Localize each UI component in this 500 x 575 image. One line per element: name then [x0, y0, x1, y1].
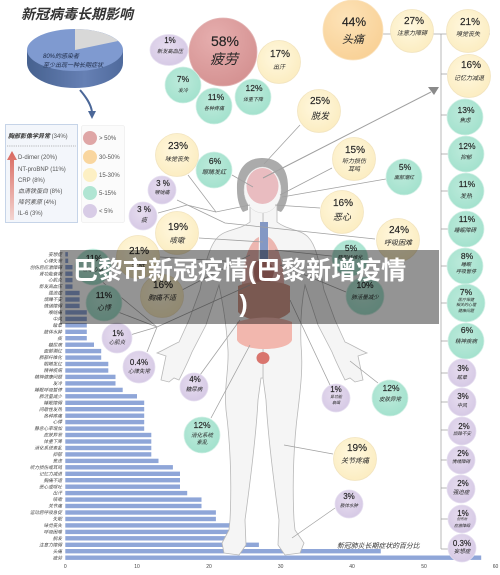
bubble: facial flushing 5%: 5% [399, 162, 412, 172]
legend [82, 126, 124, 222]
bubble: attention 27% [390, 10, 434, 52]
bubble: limb edema 3% [335, 490, 363, 518]
bubble: PTSD 1%: 1% [457, 509, 469, 518]
bubble: red eyes 6% [196, 152, 232, 188]
bar chart: share of long covid symptoms: 心悸 [53, 420, 63, 425]
pie chart: 80% of infected: 至少出现一种长期症状 [43, 61, 104, 69]
bubble: sore throat 3% [148, 176, 176, 204]
bubble: fever 11% [448, 173, 484, 209]
arrow: rising biomarkers [7, 151, 17, 220]
bubble: hearing loss 15%: 耳鸣 [348, 165, 361, 173]
bubble: skin 12%: 皮肤异常 [379, 396, 402, 403]
brain [246, 168, 278, 204]
bubble: mood disorder 2% [447, 446, 475, 474]
banner: headline overlay: ) [239, 290, 248, 318]
bubble: OCD 2%: 强迫症 [453, 489, 471, 496]
bubble: dyspnea 24%: 呼吸困难 [384, 239, 413, 247]
bubble: fatigue 58% [189, 18, 257, 86]
bar chart: share of long covid symptoms: 心肌炎 [48, 278, 62, 283]
bubble: sore throat 3%: 喉咙痛 [154, 189, 170, 196]
bubble: fever 11%: 11% [459, 179, 476, 189]
bubble: skin 12% [372, 380, 408, 416]
bubble: diabetes 4% [180, 373, 208, 401]
bubble: smell loss 21%: 21% [460, 17, 480, 28]
bubble: cough 19%: 咳嗽 [170, 236, 186, 245]
bubble: hearing loss 15% [332, 138, 376, 180]
bubble: fatigue 58%: 疲劳 [210, 51, 240, 67]
bar chart: share of long covid symptoms: 情绪障碍 [44, 304, 63, 308]
bubble: dizziness 3% [448, 359, 476, 387]
chart caption: 新冠肺炎长期症状的百分比 [337, 542, 421, 550]
bubble: facial flushing 5%: 面部潮红 [394, 174, 415, 181]
bubble: nausea 16%: 16% [333, 198, 353, 209]
bubble: mental illness 6% [448, 323, 484, 359]
bubble: digestive 12%: 消化系统 [191, 432, 214, 439]
bubble: fatigue 58%: 58% [211, 33, 239, 49]
bubble: sore throat 3%: 3 % [156, 179, 170, 188]
biomarker list: NT-proBNP (11%) [18, 167, 66, 173]
bubble: digestive 12% [184, 417, 220, 453]
bar chart: share of long covid symptoms: 呼吸困难 [44, 530, 63, 534]
bubble: depression 12% [448, 136, 484, 172]
bubble: red eyes 6%: 6% [209, 156, 222, 166]
bubble: pulmonary fibrosis 5%: 5% [345, 243, 358, 253]
legend: 15-30% [99, 173, 120, 179]
x axis labels: 30 [278, 564, 284, 570]
bar chart: share of long covid symptoms: 记忆力减退 [39, 471, 62, 476]
bubble: limb edema 3%: 3% [343, 492, 355, 501]
pie caption: 80%的感染者 [43, 52, 80, 60]
bar chart: share of long covid symptoms: 眩晕 [53, 323, 62, 328]
bubble: stroke 3% [448, 388, 476, 416]
arrow: pie to biomarkers [80, 90, 96, 119]
bubble: diabetes 4%: 4% [189, 375, 201, 384]
bubble: joint pain 19%: 19% [347, 443, 367, 454]
bar chart: share of long covid symptoms: 皮肤异常 [44, 433, 63, 438]
bar chart: share of long covid symptoms: 头痛 [53, 549, 63, 554]
x axis labels: 60 [493, 564, 498, 570]
bubble: arrhythmia 0.4%: 心律失常 [128, 368, 151, 375]
bubble: stroke 3%: 中风 [457, 402, 468, 409]
bubble: sweating 17% [258, 40, 300, 84]
bubble: pain 11% [196, 88, 232, 124]
bubble: arrhythmia 0.4%: 0.4% [130, 358, 148, 367]
bubble: stroke 3%: 3% [457, 392, 469, 401]
bar chart: share of long covid symptoms: 面部潮红 [44, 349, 63, 354]
legend: 30-50% [99, 155, 120, 161]
bubble: facial flushing 5% [386, 159, 422, 195]
bubble: chest pain 16%: 16% [153, 280, 173, 291]
bubble: 21% insomnia [116, 236, 160, 278]
bubble: memory 16%: 16% [461, 60, 481, 71]
bubble: dizziness 3%: 3% [457, 364, 469, 373]
bubble: cough 19% [156, 212, 198, 254]
biomarker list: IL-6 (3%) [18, 211, 43, 217]
bubble: digestive 12%: 紊乱 [196, 439, 208, 446]
bubble: weight loss 12% [235, 79, 271, 115]
bubble: PTSD 1%: 应激障碍 [454, 523, 471, 528]
bubble: new hypertension 1%: 1% [164, 36, 176, 45]
bubble: phlegm 3%: 痰 [141, 216, 148, 224]
bar chart: share of long covid symptoms: 眼睛发红 [44, 362, 63, 367]
bubble: sleep disorder 11%: 11% [459, 214, 476, 224]
bar chart: share of long covid symptoms: 妄想症 [48, 252, 63, 257]
lungs [242, 237, 284, 285]
bubble: memory 16% [448, 54, 490, 98]
bubble: pain 11%: 各种疼痛 [204, 105, 225, 112]
bar chart: share of long covid symptoms: 消化系统紊乱 [34, 446, 62, 451]
bubble: resting heart rate 11%: 静息心率 [83, 266, 104, 273]
x axis labels: 10 [134, 564, 140, 570]
biomarker list: D-dimer (20%) [18, 155, 57, 161]
bar chart: share of long covid symptoms: 强迫症 [48, 291, 63, 296]
arrow: to neuro symptom column [428, 87, 439, 95]
bubble: chills 7% [165, 67, 201, 103]
bubble: myocarditis 1%: 1% [112, 329, 124, 338]
bar chart: share of long covid symptoms: 体重下降 [44, 439, 62, 444]
bar chart: share of long covid symptoms: 失眠 [53, 517, 63, 522]
human body figure [157, 158, 367, 555]
bubble: anxiety 13% [447, 99, 483, 135]
bubble: paranoia 0.3%: 妄想症 [454, 548, 472, 555]
bubble: mental health 7%: 相关的心理 [456, 302, 477, 307]
panel: imaging and biomarkers: 胸部影像学异常 (34%) [8, 132, 68, 140]
banner: headline overlay [60, 250, 439, 324]
bubble: palpitations 11% [86, 285, 122, 321]
bubble: kidney failure 1%: 衰竭 [332, 400, 341, 405]
x axis labels [64, 564, 498, 570]
bubble: mental health 7%: 健康问题 [458, 308, 475, 313]
bubble: headache 44%: 44% [342, 15, 366, 29]
bubble: attention 27%: 27% [404, 16, 424, 27]
bar chart: share of long covid symptoms: 新发高血压 [39, 284, 63, 289]
bubble: red eyes 6%: 眼睛发红 [202, 168, 227, 176]
banner: headline overlay: 巴黎市新冠疫情(巴黎新增疫情 [73, 257, 406, 285]
bubble: anxiety 13%: 13% [457, 105, 475, 115]
bar chart: share of long covid symptoms: 肺部纤维化 [39, 355, 63, 360]
bubble: reduced lung capacity 10%: 肺活量减少 [351, 294, 379, 301]
legend: 5-15% [99, 191, 117, 197]
pie chart: 80% of infected [27, 29, 123, 88]
bubble: myocarditis 1% [102, 323, 132, 353]
bubble: hearing loss 15%: 听力损伤 [342, 157, 367, 165]
bubble: weight loss 12%: 体重下降 [243, 96, 264, 103]
bar chart: share of long covid symptoms: 咳嗽 [53, 497, 63, 502]
bubble: myocarditis 1%: 心肌炎 [109, 339, 126, 346]
bubble: sleep apnea 8%: 睡眠 [461, 261, 472, 268]
bar chart: share of long covid symptoms: 静息心率增加 [34, 426, 63, 431]
bubble: mental illness 6%: 6% [461, 325, 474, 335]
bubble: limb edema 3%: 肢体水肿 [340, 503, 358, 508]
bubble: taste loss 23%: 味觉丧失 [165, 155, 190, 163]
bar chart: share of long covid symptoms: 烦躁不安 [44, 297, 63, 302]
intestines [237, 318, 292, 349]
bladder [256, 352, 270, 364]
bubble: resting heart rate 11% [75, 249, 111, 285]
face [244, 167, 281, 213]
bubble: nausea 16% [320, 190, 364, 234]
bar chart: share of long covid symptoms: 恶心或呕吐 [39, 484, 62, 489]
bubble: mental health 7%: 7% [460, 287, 473, 297]
bubble: hair loss 25%: 25% [310, 96, 330, 107]
bubble: PTSD 1% [448, 505, 476, 533]
bar chart: share of long covid symptoms: 味觉丧失 [44, 523, 62, 528]
bar chart: share of long covid symptoms: 疲劳 [53, 555, 63, 560]
bubble: joint pain 19% [334, 438, 376, 480]
bubble: paranoia 0.3% [448, 534, 476, 562]
bar chart: share of long covid symptoms: 关节痛 [48, 504, 63, 509]
bubble: weight loss 12%: 12% [245, 83, 263, 93]
biomarker list: 降钙素原 (4%) [18, 198, 56, 206]
bar chart: share of long covid symptoms: 发冷 [53, 381, 62, 386]
bar chart: share of long covid symptoms: 睡眠呼吸暂停 [34, 388, 63, 392]
bar chart: share of long covid symptoms: 精神健康问题 [34, 374, 63, 380]
bubble: depression 12%: 12% [458, 141, 476, 151]
bubble: depression 12%: 抑郁 [460, 154, 473, 161]
bubble: attention 27%: 注意力障碍 [397, 29, 428, 37]
bubble: hair loss 25%: 脱发 [311, 111, 330, 121]
bubble: mood disorder 2%: 2% [457, 449, 469, 458]
bar chart: share of long covid symptoms: 抑郁 [53, 452, 63, 457]
bubble: mood disorder 2%: 情绪障碍 [452, 459, 470, 464]
bubble: OCD 2% [447, 475, 475, 503]
panel: imaging and biomarkers [6, 124, 78, 222]
bubble: mental health 7%: 医疗保健 [458, 297, 475, 302]
bubble: palpitations 11%: 心悸 [97, 304, 112, 312]
bubble: sleep apnea 8%: 呼吸暂停 [456, 268, 477, 275]
bubble: paranoia 0.3%: 0.3% [453, 539, 471, 548]
bubble: memory 16%: 记忆力减退 [454, 74, 485, 82]
bubble: fever 11%: 发热 [460, 192, 473, 200]
bubble: smell loss 21%: 嗅觉丧失 [456, 30, 481, 38]
biomarker list: 血清铁蛋白 (8%) [18, 187, 62, 195]
body silhouette [263, 204, 367, 555]
bar chart: share of long covid symptoms: 睡眠障碍 [44, 400, 63, 405]
bubble: hearing loss 15%: 15% [345, 145, 365, 156]
bubble: chills 7%: 发冷 [178, 87, 189, 94]
bar chart: share of long covid symptoms: 焦虑 [53, 458, 63, 464]
bubble: smell loss 21% [446, 10, 490, 52]
x axis labels: 20 [206, 564, 212, 570]
bubble: reduced lung capacity 10% [346, 277, 384, 315]
bar chart: share of long covid symptoms: 痰 [57, 336, 63, 341]
bar chart: share of long covid symptoms: 创伤后应激障碍 [30, 265, 63, 270]
bubble: headache 44%: 头痛 [342, 33, 366, 46]
bubble: dyspnea 24%: 24% [389, 225, 409, 236]
bubble: digestive 12%: 12% [193, 420, 211, 430]
bubble: phlegm 3%: 3 % [137, 205, 151, 214]
trachea [260, 222, 268, 260]
bubble: mental illness 6%: 精神疾病 [455, 338, 478, 345]
bubble: mental health 7% [447, 284, 485, 322]
bubble: restlessness 2% [448, 417, 476, 445]
bubble: pulmonary fibrosis 5%: 肺部纤维化 [337, 254, 363, 261]
bar chart: share of long covid symptoms: 听力损伤或耳鸣 [30, 465, 62, 470]
bubble: pain 11%: 11% [208, 92, 225, 102]
bubble: nausea 16%: 恶心 [333, 212, 352, 222]
biomarker list: CRP (8%) [18, 178, 45, 184]
bubble: new hypertension 1%: 新发高血压 [157, 48, 184, 55]
bubble: restlessness 2%: 2% [458, 422, 470, 431]
bubble: chest pain 16%: 胸痛不适 [148, 294, 177, 302]
bubble: anxiety 13%: 焦虑 [459, 117, 472, 124]
bubble: sleep apnea 8% [447, 248, 483, 284]
x axis labels: 50 [421, 564, 427, 570]
bubble: sleep apnea 8%: 8% [461, 251, 474, 261]
bubble: dizziness 3%: 眩晕 [457, 374, 468, 381]
bubble: sleep disorder 11% [448, 211, 484, 247]
bar chart: share of long covid symptoms: 肺活量减少 [39, 394, 62, 399]
bubble: chest pain 16% [140, 274, 184, 318]
bubble: sleep disorder 11%: 睡眠障碍 [454, 227, 477, 234]
bubble: headache 44% [323, 0, 383, 60]
bubble: sweating 17%: 出汗 [273, 63, 286, 71]
heart [254, 260, 274, 288]
bar chart: share of long covid symptoms: 中风 [53, 316, 62, 322]
bubble: new hypertension 1% [150, 34, 188, 66]
bubble: hair loss 25% [298, 90, 340, 132]
biomarker list [18, 155, 66, 217]
bubble: OCD 2%: 2% [457, 479, 469, 488]
x axis labels: 0 [64, 564, 67, 570]
bar chart: share of long covid symptoms: 各种疼痛 [44, 413, 63, 418]
bubble: phlegm 3% [129, 202, 157, 230]
bubble: reduced lung capacity 10%: 10% [356, 280, 374, 290]
hair [237, 158, 288, 212]
bar chart: share of long covid symptoms: 肢体水肿 [44, 329, 62, 334]
bubble: pulmonary fibrosis 5% [332, 240, 368, 276]
bar chart: share of long covid symptoms: 注意力障碍 [39, 542, 63, 547]
bubble: kidney failure 1% [322, 384, 350, 412]
bubble: dyspnea 24% [376, 218, 420, 262]
bubble: 21% insomnia: 21% [129, 246, 149, 257]
liver and stomach [238, 282, 290, 321]
bubble: sweating 17%: 17% [270, 49, 290, 60]
bar chart: share of long covid symptoms: 心律失常 [44, 258, 63, 263]
bar chart: share of long covid symptoms: 胸痛不适 [44, 478, 63, 483]
bar chart: share of long covid symptoms: 出汗 [53, 491, 63, 496]
bar chart: share of long covid symptoms: 肾功能衰竭 [39, 271, 63, 276]
bar chart: share of long covid symptoms [30, 252, 498, 570]
title: 新冠病毒长期影响 [21, 6, 135, 22]
bubble: palpitations 11%: 11% [96, 290, 113, 300]
bubble: cough 19%: 19% [168, 222, 188, 233]
legend: > 50% [99, 136, 117, 142]
bubble: arrhythmia 0.4% [123, 351, 155, 383]
bubble: diabetes 4%: 糖尿病 [186, 386, 204, 393]
bar chart: share of long covid symptoms: 喉咙痛 [48, 310, 63, 315]
x axis labels: 40 [349, 564, 355, 570]
bubble: kidney failure 1%: 肾功能 [330, 394, 343, 399]
bubble: 21% insomnia: 失眠 [131, 261, 146, 269]
bubble: resting heart rate 11%: 11% [86, 253, 103, 263]
body silhouette left [157, 204, 263, 555]
bubble: chills 7%: 7% [177, 74, 190, 84]
bubble: taste loss 23% [156, 134, 198, 176]
bubble: kidney failure 1%: 1% [330, 385, 342, 394]
bubble: restlessness 2%: 烦躁不安 [453, 431, 471, 436]
connector lines [100, 34, 490, 549]
bar chart: share of long covid symptoms: 糖尿病 [48, 342, 63, 347]
bubble: joint pain 19%: 关节疼痛 [341, 457, 370, 465]
bubble: PTSD 1%: 创伤后 [457, 517, 468, 521]
bar chart: share of long covid symptoms: 间歇性发热 [39, 407, 62, 412]
bubble: skin 12%: 12% [382, 383, 400, 393]
bar chart: share of long covid symptoms: 运动后呼吸急促 [30, 510, 62, 515]
bar chart: share of long covid symptoms: 脱发 [53, 536, 62, 541]
bar chart: share of long covid symptoms: 精神疾病 [44, 368, 63, 373]
bubble: taste loss 23%: 23% [168, 141, 188, 152]
legend: < 5% [99, 209, 114, 215]
